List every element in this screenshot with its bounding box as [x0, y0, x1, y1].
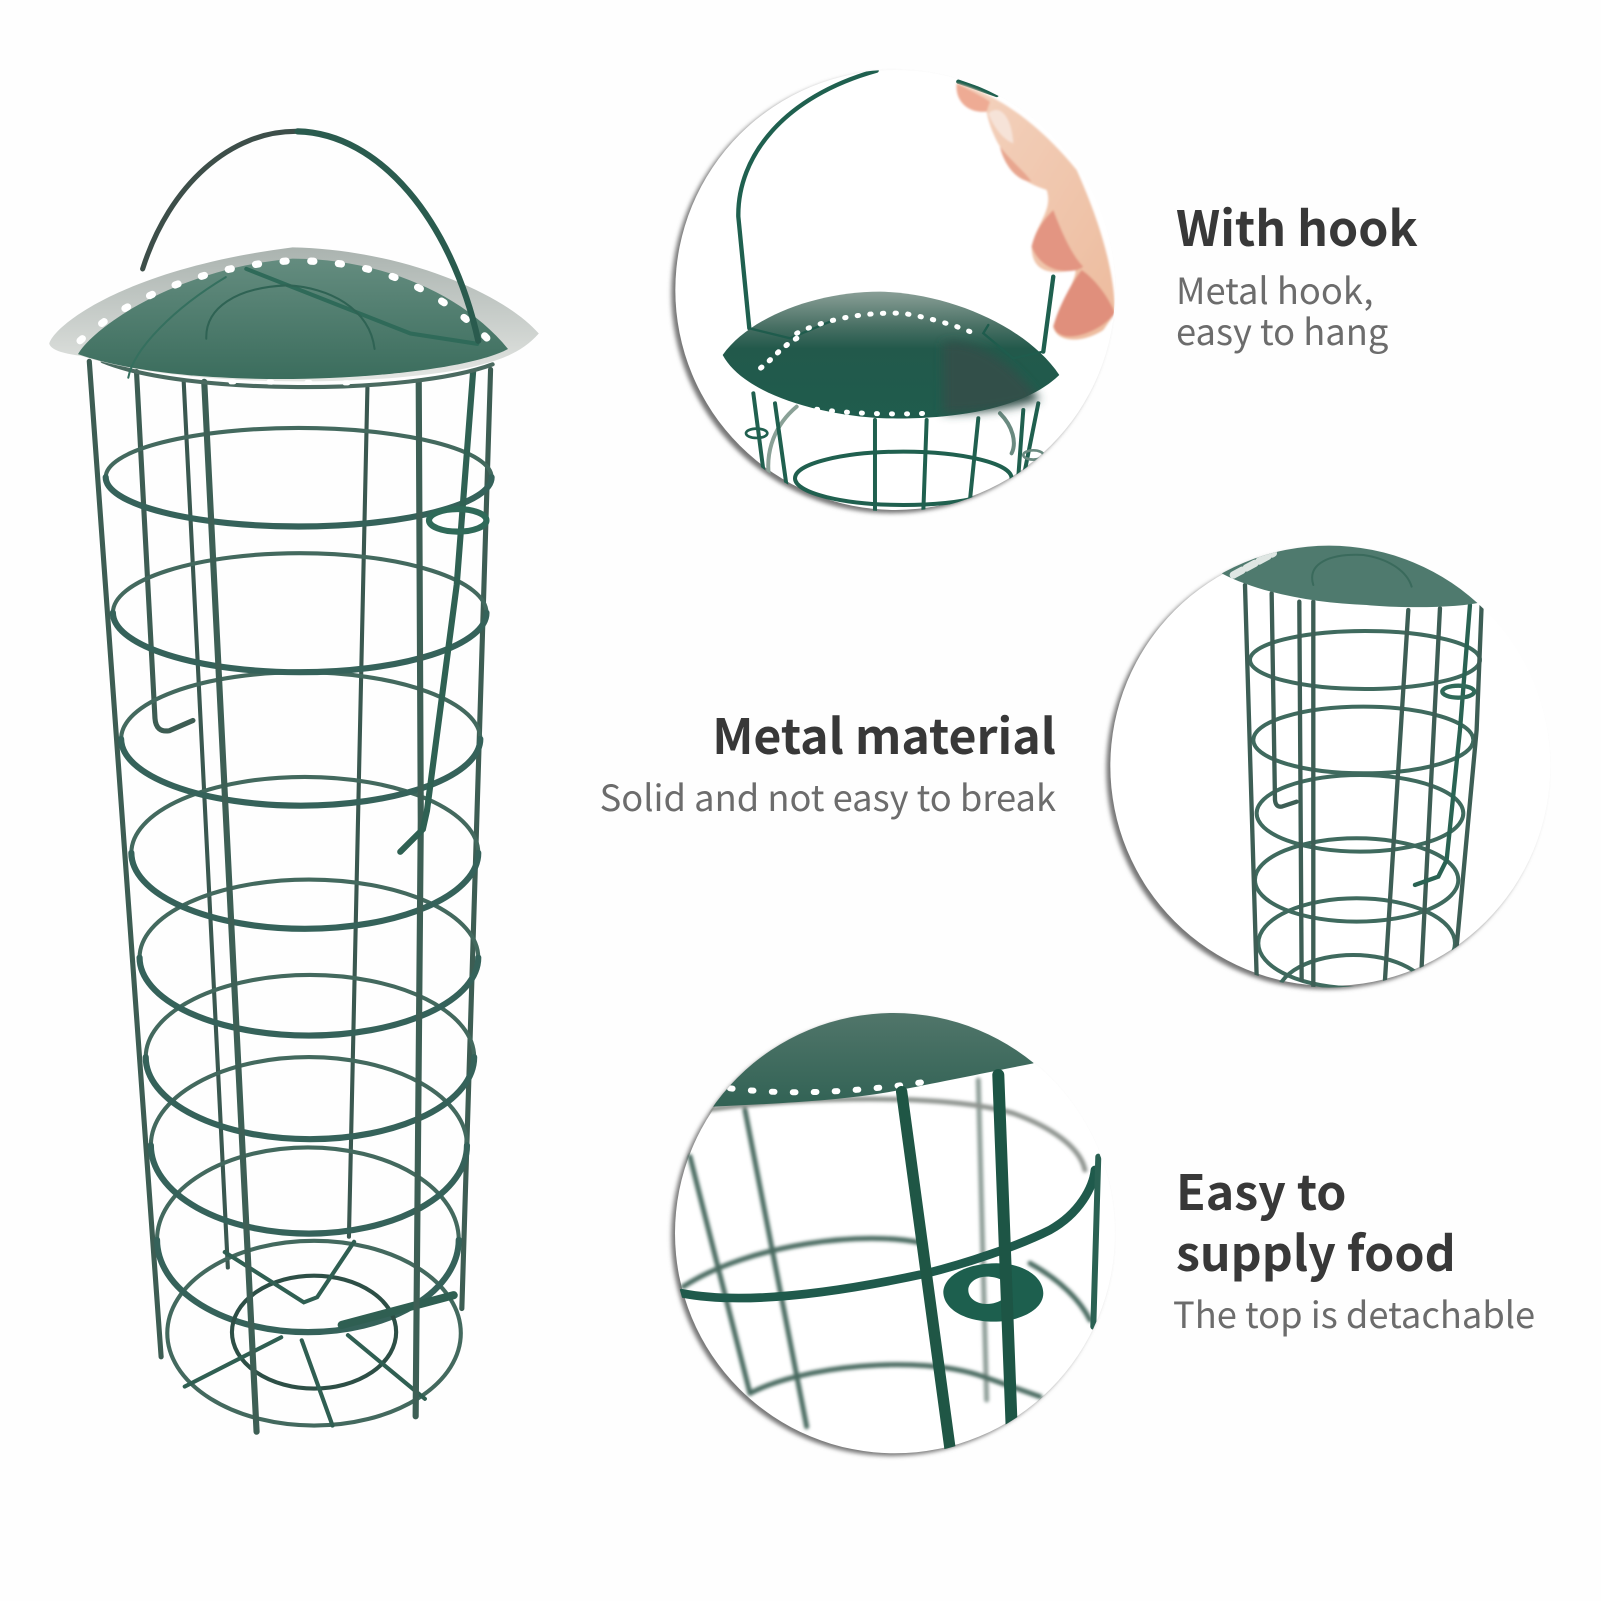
handle wire — [738, 71, 1053, 352]
label: easy to supply food — [1173, 1154, 1535, 1339]
detail circle: hook — [671, 70, 1115, 513]
ring front halves — [106, 477, 492, 1332]
blurred background wires — [683, 1080, 1090, 1427]
front wires — [204, 382, 421, 1432]
label: easy to supply food: Easy to — [1176, 1154, 1346, 1224]
wires — [1245, 585, 1482, 988]
label: with hook: easy to hang — [1176, 304, 1388, 356]
handle — [143, 131, 478, 341]
main product: bird feeder cage — [49, 131, 539, 1432]
label: metal material: Metal material — [712, 698, 1056, 768]
washer — [429, 509, 486, 532]
washer — [1442, 686, 1474, 698]
lid — [49, 247, 539, 387]
label: with hook: Metal hook, — [1176, 263, 1374, 315]
rings — [1249, 629, 1482, 988]
sharp front ring — [682, 1170, 1095, 1298]
label: with hook: With hook — [1176, 190, 1418, 260]
back ring and wires — [746, 393, 1043, 512]
label: metal material — [600, 698, 1056, 822]
washer — [943, 1263, 1043, 1322]
hook — [1415, 605, 1470, 885]
label: metal material: Solid and not easy to break — [600, 770, 1056, 822]
detail circle: detachable top — [671, 1000, 1115, 1456]
rings — [106, 428, 492, 1426]
back wires — [184, 382, 367, 1267]
hook wire — [400, 372, 473, 852]
label: easy to supply food: supply food — [1176, 1215, 1456, 1285]
detail circle: cage — [1103, 546, 1542, 992]
side wires — [89, 361, 491, 1357]
lid — [713, 1013, 1034, 1107]
label: with hook — [1176, 190, 1418, 356]
label: easy to supply food: The top is detachable — [1173, 1287, 1535, 1339]
hand — [956, 83, 1115, 340]
lid — [723, 292, 1059, 418]
lid — [1222, 544, 1483, 607]
base inner ring and spokes — [185, 1242, 454, 1426]
front wires — [902, 1092, 950, 1448]
